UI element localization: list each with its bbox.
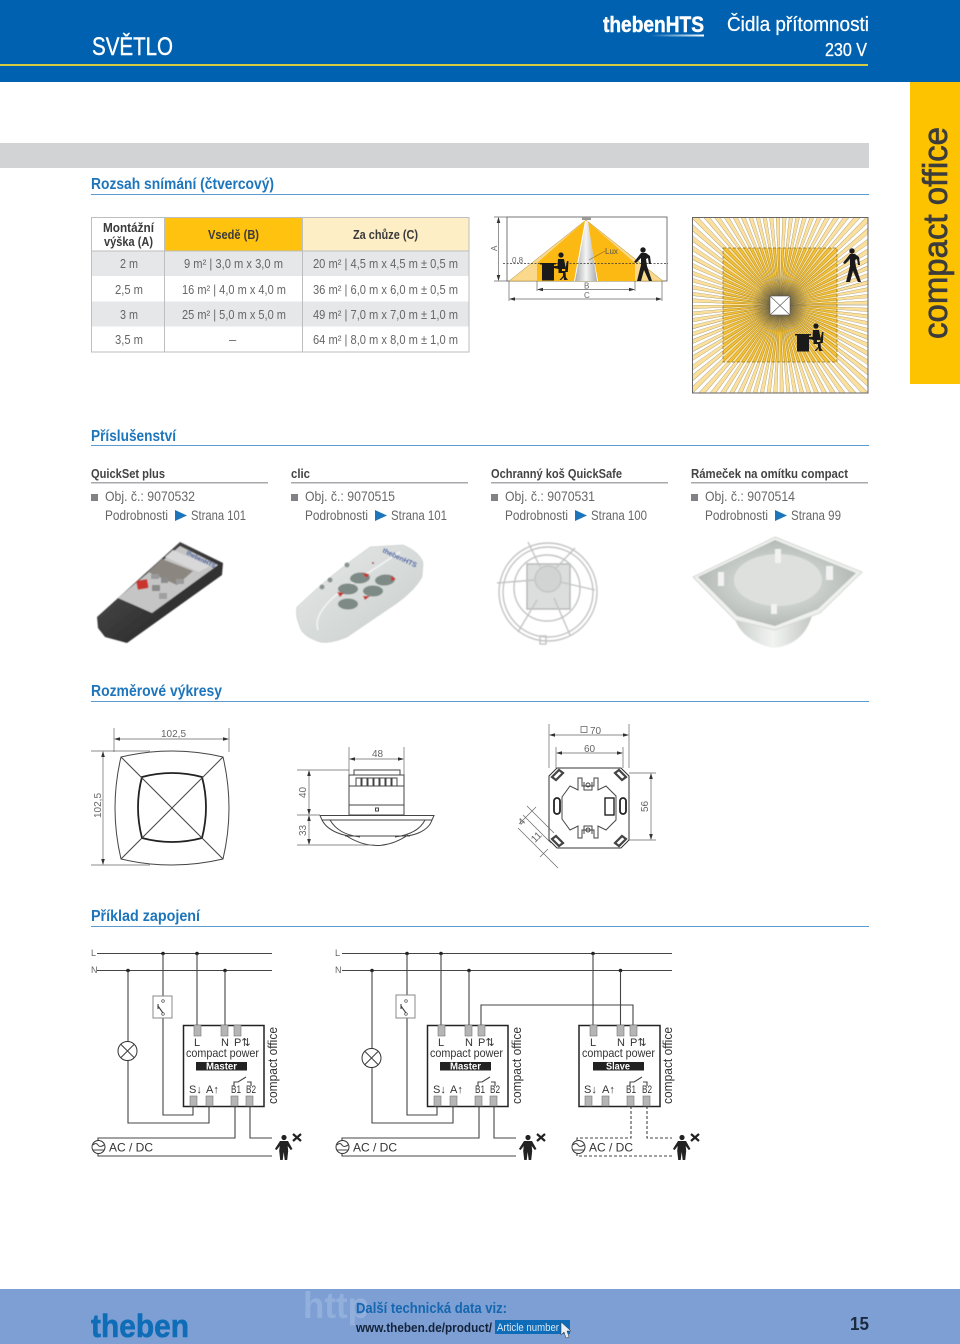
mains lines: L bbox=[91, 948, 96, 958]
accessory: QuickSafe cage: Obj. č.: 9070531 bbox=[505, 488, 595, 504]
module: compact power master: B2 bbox=[246, 1084, 256, 1096]
module: compact power master: Master bbox=[206, 1062, 237, 1072]
icon: lamp bbox=[118, 1042, 137, 1060]
icon: seated person at desk bbox=[795, 323, 824, 352]
photo: QuickSet plus remote: thebenHTS bbox=[185, 550, 216, 570]
diagram: side view of detection cone bbox=[490, 217, 668, 301]
module: compact power master: L bbox=[194, 1037, 200, 1049]
table row 2,5 m: 16 m² | 4,0 m x 4,0 m bbox=[182, 282, 286, 297]
drawing: front view bbox=[91, 728, 229, 865]
table row 3,5 m: 3,5 m bbox=[115, 332, 143, 347]
page number: 15 bbox=[850, 1314, 869, 1334]
grey band bbox=[0, 143, 869, 168]
dimension label: 48 bbox=[372, 749, 384, 760]
module: compact power master: N bbox=[221, 1037, 229, 1049]
table row 2 m: 9 m² | 3,0 m x 3,0 m bbox=[184, 256, 283, 271]
dimension C bbox=[509, 281, 662, 301]
module: compact power slave: P⇅ bbox=[630, 1037, 647, 1049]
header band bbox=[0, 0, 960, 82]
article number field bbox=[495, 1320, 571, 1338]
icon: sensor bbox=[770, 296, 790, 315]
module: compact power slave: A↑ bbox=[602, 1084, 615, 1096]
dimension C: C bbox=[584, 291, 590, 300]
photo: QuickSet plus remote bbox=[97, 542, 223, 643]
watermark: http: http bbox=[303, 1285, 369, 1326]
dimension label: 102,5 bbox=[93, 793, 104, 818]
icon: AC/DC source: AC / DC bbox=[589, 1140, 633, 1154]
technical data link text: Další technická data viz: bbox=[356, 1300, 507, 1317]
module: compact power slave: B1 bbox=[626, 1084, 636, 1096]
dimension label: square 70: 70 bbox=[590, 726, 602, 737]
accessory: compact frame bbox=[691, 466, 868, 523]
accessory: QuickSet plus: Obj. č.: 9070532 bbox=[105, 488, 195, 504]
module: compact power master: P⇅ bbox=[234, 1037, 251, 1049]
accessory: clic: Strana 101 bbox=[391, 507, 447, 523]
photo: clic remote bbox=[296, 545, 423, 642]
wiring diagram: master and slave bbox=[335, 948, 699, 1160]
dimension label: 60 bbox=[584, 744, 596, 755]
article number field: Article number bbox=[497, 1322, 559, 1334]
dimension A bbox=[490, 217, 507, 281]
heading: wiring example: Příklad zapojení bbox=[91, 908, 200, 925]
icon: lamp bbox=[362, 1048, 381, 1068]
mains lines: N bbox=[335, 965, 342, 975]
dimension label: square 70 bbox=[581, 726, 602, 737]
label: Lux: Lux bbox=[605, 247, 618, 256]
heading: dimension drawings: Rozměrové výkresy bbox=[91, 683, 222, 700]
dimension B bbox=[537, 281, 635, 291]
table row 2 m: 2 m bbox=[120, 256, 138, 271]
accessory: compact frame: Rámeček na omítku compact bbox=[691, 466, 849, 481]
dimension label: 56 bbox=[640, 800, 651, 812]
table row 2 m: 20 m² | 4,5 m x 4,5 m ± 0,5 m bbox=[313, 256, 458, 271]
icon: seated person at desk bbox=[540, 252, 568, 280]
photo: clic remote: thebenHTS bbox=[381, 547, 418, 570]
module: compact power master: B1 bbox=[475, 1084, 485, 1096]
heading: detection range: Rozsah snímání (čtvercový) bbox=[91, 176, 274, 193]
accessory: QuickSet plus bbox=[91, 466, 268, 523]
module: compact power slave: L bbox=[590, 1037, 596, 1049]
rotated label: compact office bbox=[660, 1027, 675, 1104]
module: compact power master: L bbox=[438, 1037, 444, 1049]
dimension label: 4 bbox=[516, 816, 528, 828]
rotated label: compact office bbox=[509, 1027, 524, 1104]
accessory: compact frame: Strana 99 bbox=[791, 507, 841, 523]
wiring diagram: master only bbox=[91, 948, 301, 1160]
table row 2,5 m: 36 m² | 6,0 m x 6,0 m ± 0,5 m bbox=[313, 282, 458, 297]
dimension label: 33 bbox=[298, 824, 309, 836]
module: compact power master: S↓ bbox=[433, 1084, 446, 1096]
table row 3,5 m bbox=[115, 332, 458, 347]
module: compact power master bbox=[184, 1025, 264, 1106]
label: 0.8: 0,8 bbox=[512, 256, 524, 265]
table header: výška (A) bbox=[104, 234, 153, 249]
accessory: clic: Podrobnosti bbox=[305, 507, 368, 523]
table row 3 m: 25 m² | 5,0 m x 5,0 m bbox=[182, 307, 286, 322]
accessory: QuickSafe cage: Strana 100 bbox=[591, 507, 647, 523]
voltage: 230 V bbox=[825, 40, 867, 60]
module: compact power master: A↑ bbox=[206, 1084, 219, 1096]
icon: walking person bbox=[843, 248, 861, 282]
logo: theben: theben bbox=[91, 1308, 189, 1344]
module: compact power master bbox=[428, 1025, 508, 1106]
footer band bbox=[0, 1285, 960, 1344]
dimension label: 40 bbox=[298, 786, 309, 798]
brand logo: thebenHTS: thebenHTS bbox=[603, 12, 704, 37]
table row 2 m bbox=[120, 256, 458, 271]
module: compact power master: compact power bbox=[430, 1046, 503, 1060]
dimension A: A bbox=[490, 245, 499, 251]
accessory: QuickSafe cage bbox=[491, 466, 668, 523]
accessory: QuickSafe cage: Podrobnosti bbox=[505, 507, 568, 523]
product family title: Čidla přítomnosti bbox=[727, 13, 869, 36]
table header: Vsedě (B) bbox=[208, 227, 259, 242]
dimension B: B bbox=[584, 282, 589, 290]
photo: QuickSafe cage bbox=[497, 542, 597, 644]
module: compact power master: B2 bbox=[490, 1084, 500, 1096]
module: compact power slave: S↓ bbox=[584, 1084, 597, 1096]
photo: compact frame bbox=[693, 537, 862, 648]
accessory: clic: clic bbox=[291, 466, 310, 481]
module: compact power master: P⇅ bbox=[478, 1037, 495, 1049]
module: compact power slave: B2 bbox=[642, 1084, 652, 1096]
table row 3 m: 49 m² | 7,0 m x 7,0 m ± 1,0 m bbox=[313, 307, 458, 322]
icon: switch bbox=[153, 996, 172, 1018]
accessory: QuickSafe cage: Ochranný koš QuickSafe bbox=[491, 466, 622, 481]
module: compact power slave bbox=[579, 1025, 660, 1106]
module: compact power master: S↓ bbox=[189, 1084, 202, 1096]
module: compact power slave: compact power bbox=[582, 1046, 655, 1060]
table row 3,5 m: 64 m² | 8,0 m x 8,0 m ± 1,0 m bbox=[313, 332, 458, 347]
accessory: compact frame: Podrobnosti bbox=[705, 507, 768, 523]
module: compact power master: N bbox=[465, 1037, 473, 1049]
icon: AC/DC source: AC / DC bbox=[109, 1140, 153, 1154]
table row 3 m: 3 m bbox=[120, 307, 138, 322]
accessory: clic: Obj. č.: 9070515 bbox=[305, 488, 395, 504]
module: compact power slave: N bbox=[617, 1037, 625, 1049]
mains lines bbox=[91, 948, 272, 975]
mains lines bbox=[335, 948, 672, 975]
mains lines: L bbox=[335, 948, 340, 958]
table row 2,5 m bbox=[115, 282, 458, 297]
accessory: clic bbox=[291, 466, 468, 523]
heading: accessories: Příslušenství bbox=[91, 428, 176, 445]
table header: Za chůze (C) bbox=[353, 227, 418, 242]
table header: Montážní bbox=[103, 220, 154, 235]
module: compact power slave: Slave bbox=[606, 1062, 630, 1072]
table header bbox=[103, 220, 418, 249]
side tab: compact office: compact office bbox=[917, 127, 955, 339]
table row 2,5 m: 2,5 m bbox=[115, 282, 143, 297]
module: compact power master: Master bbox=[450, 1062, 481, 1072]
accessory: compact frame: Obj. č.: 9070514 bbox=[705, 488, 795, 504]
dimension label: 11 bbox=[529, 830, 545, 845]
dimension label: 102,5 bbox=[161, 729, 186, 740]
accessory: QuickSet plus: QuickSet plus bbox=[91, 466, 165, 481]
module: compact power master: A↑ bbox=[450, 1084, 463, 1096]
icon: switch bbox=[396, 995, 415, 1018]
mains lines: N bbox=[91, 965, 98, 975]
icon: person with fan load bbox=[519, 1134, 545, 1160]
drawing: mounting plate bbox=[516, 724, 656, 868]
dashed slave output wiring bbox=[577, 1106, 672, 1156]
icon: person with fan load bbox=[275, 1134, 301, 1160]
table: detection range bbox=[91, 217, 469, 352]
rotated label: compact office bbox=[265, 1027, 280, 1104]
module: compact power master: compact power bbox=[186, 1046, 259, 1060]
accessory: QuickSet plus: Podrobnosti bbox=[105, 507, 168, 523]
icon: walking person bbox=[634, 247, 652, 281]
icon: person with fan load bbox=[673, 1134, 699, 1160]
section title: SVĚTLO bbox=[92, 32, 173, 61]
side tab: compact office bbox=[910, 82, 960, 384]
table row 3 m bbox=[120, 307, 458, 322]
diagram: floor plan of detection area bbox=[692, 217, 868, 393]
module: compact power master: B1 bbox=[231, 1084, 241, 1096]
table row 3,5 m: – bbox=[229, 332, 237, 347]
drawing: side view bbox=[297, 747, 434, 846]
accessory: QuickSet plus: Strana 101 bbox=[191, 507, 246, 523]
icon: AC/DC source: AC / DC bbox=[353, 1140, 397, 1154]
url: www.theben.de/product/ bbox=[355, 1320, 492, 1335]
